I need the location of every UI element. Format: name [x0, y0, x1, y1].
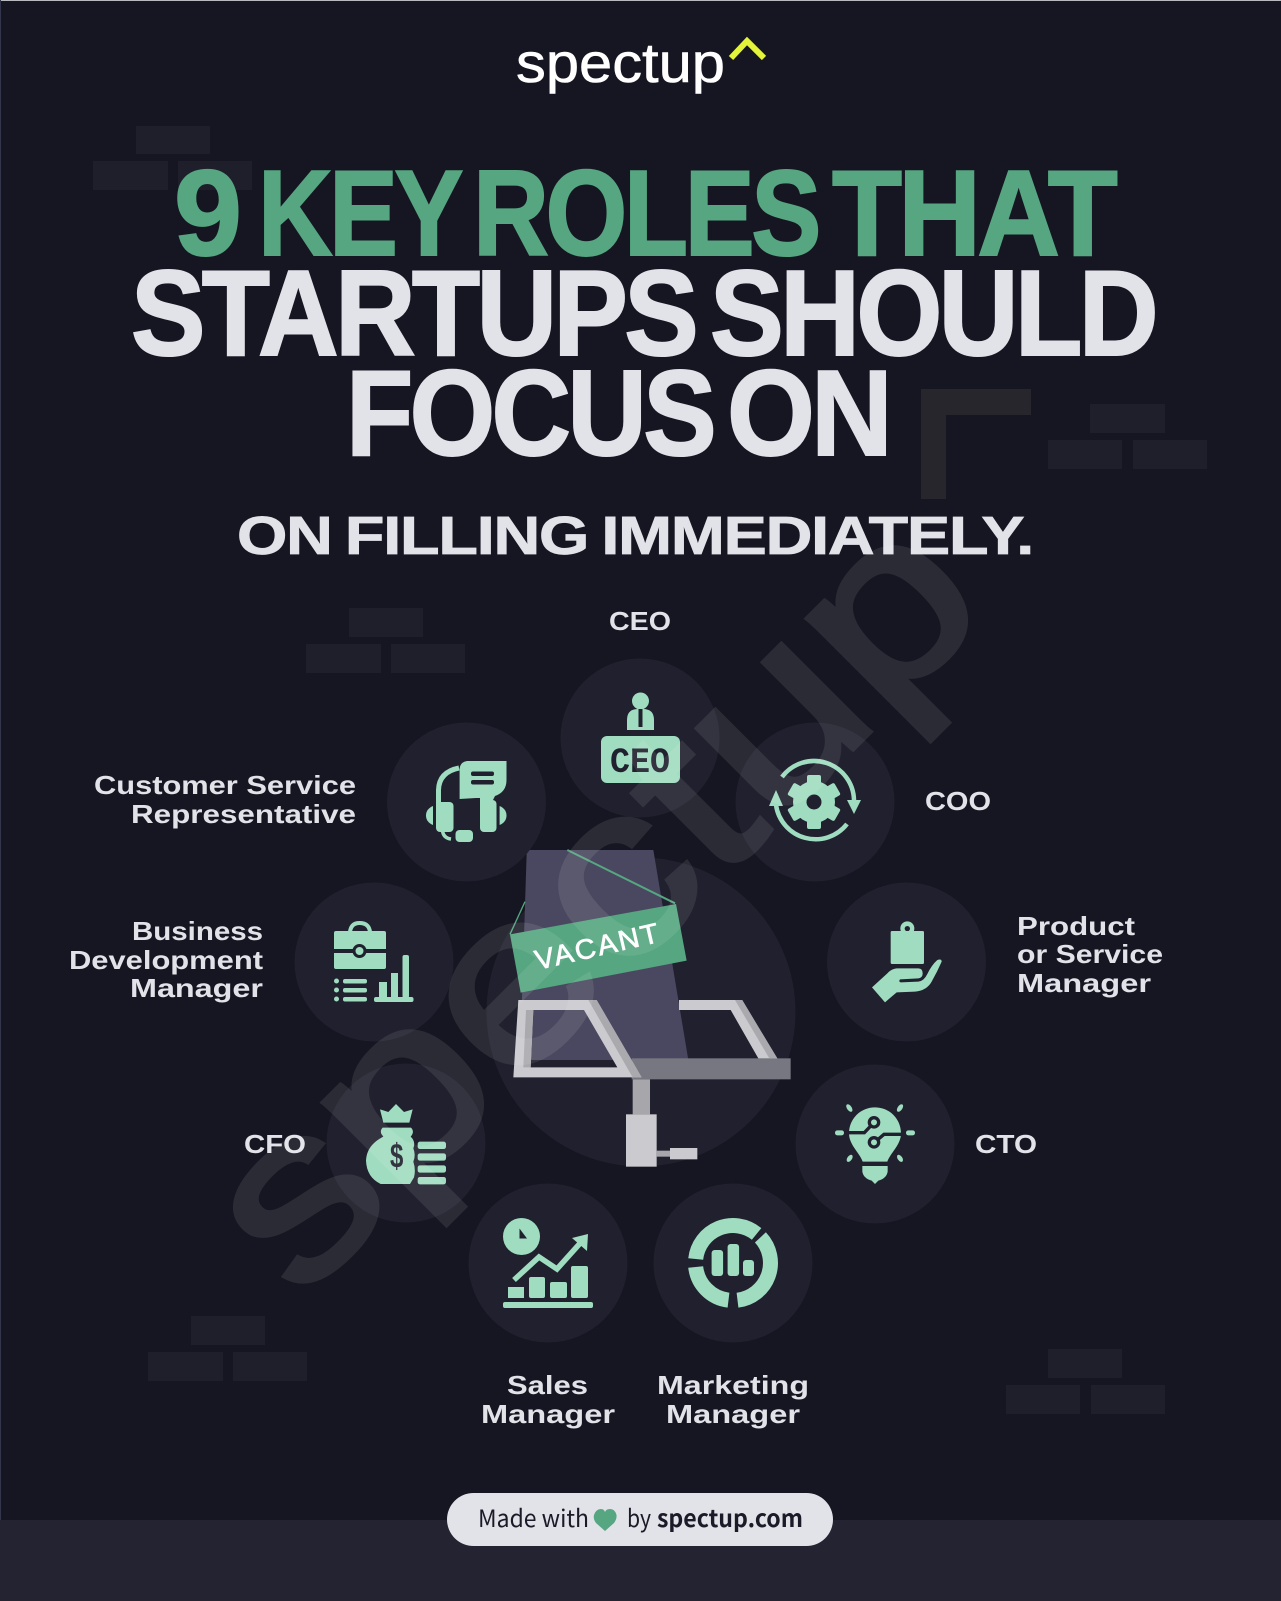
icon: CEO sign: CEO	[610, 743, 670, 783]
role: CFO	[244, 1064, 486, 1222]
label: Business Development Manager: Development	[69, 945, 263, 975]
label: Customer Service Representative: Representative	[131, 799, 356, 829]
footer badge: spectup.com	[657, 1499, 803, 1534]
label: Sales Manager	[481, 1370, 615, 1429]
title: ON	[727, 345, 889, 481]
role: Business Development Manager	[69, 882, 454, 1042]
icon: hand holding bag	[872, 921, 942, 1002]
title	[131, 145, 1155, 481]
label: CFO: CFO	[244, 1129, 306, 1159]
label: Marketing Manager: Manager	[666, 1399, 800, 1429]
label: Business Development Manager: Business	[132, 916, 263, 946]
label: Sales Manager: Manager	[481, 1399, 615, 1429]
role: Customer Service Representative	[94, 722, 546, 882]
vacant sign: VACANT	[532, 917, 664, 976]
title: SHOULD	[710, 245, 1155, 381]
role: CEO	[560, 606, 720, 818]
footer badge: by	[627, 1499, 651, 1534]
label: Marketing Manager: Marketing	[657, 1370, 809, 1400]
label: Business Development Manager	[69, 916, 263, 1003]
icon: money bag and coins	[366, 1104, 446, 1184]
icon: briefcase and chart	[334, 923, 414, 1002]
label: Business Development Manager: Manager	[130, 973, 263, 1003]
footer badge: Made with	[478, 1499, 589, 1534]
label: Sales Manager: Sales	[507, 1370, 588, 1400]
role: Marketing Manager	[654, 1184, 812, 1429]
icon: headset with chat bubble	[426, 761, 506, 842]
label: CTO: CTO	[975, 1129, 1037, 1159]
role: CTO	[796, 1064, 1037, 1224]
subtitle: ON FILLING IMMEDIATELY.	[237, 506, 1033, 566]
label: Product or Service Manager: Product	[1017, 911, 1135, 941]
title: 9	[174, 145, 238, 281]
title: STARTUPS	[131, 245, 695, 381]
title: ROLES	[473, 145, 818, 281]
icon: donut chart	[696, 1226, 770, 1300]
vacant sign	[510, 850, 687, 993]
label: Product or Service Manager: Manager	[1017, 968, 1151, 998]
role: Sales Manager	[468, 1184, 628, 1429]
logo: spectup: spectup	[516, 31, 725, 94]
label: Product or Service Manager	[1017, 911, 1163, 998]
title: FOCUS	[346, 345, 713, 481]
label: CEO: CEO	[609, 606, 671, 636]
title: THAT	[832, 145, 1117, 281]
chair backdrop circle	[486, 858, 796, 1166]
vacant chair illustration	[510, 850, 791, 1167]
label: Customer Service Representative	[94, 770, 356, 829]
role: COO	[736, 722, 991, 882]
footer badge	[447, 1493, 833, 1546]
label: Customer Service Representative: Customer Service	[94, 770, 356, 800]
icon: heart	[594, 1509, 617, 1531]
role: Product or Service Manager	[827, 882, 1163, 1042]
icon: CEO sign	[601, 692, 680, 783]
label: COO: COO	[925, 786, 991, 816]
icon: lightbulb with circuit	[835, 1103, 915, 1184]
label: Product or Service Manager: or Service	[1017, 939, 1163, 969]
title: KEY	[258, 145, 462, 281]
watermark: spectup: spectup	[149, 458, 1029, 1338]
label: Marketing Manager	[657, 1370, 809, 1429]
icon: money bag and coins: $	[390, 1137, 403, 1175]
icon: gear with arrows	[769, 761, 861, 839]
icon: clock and growth chart	[503, 1218, 593, 1308]
